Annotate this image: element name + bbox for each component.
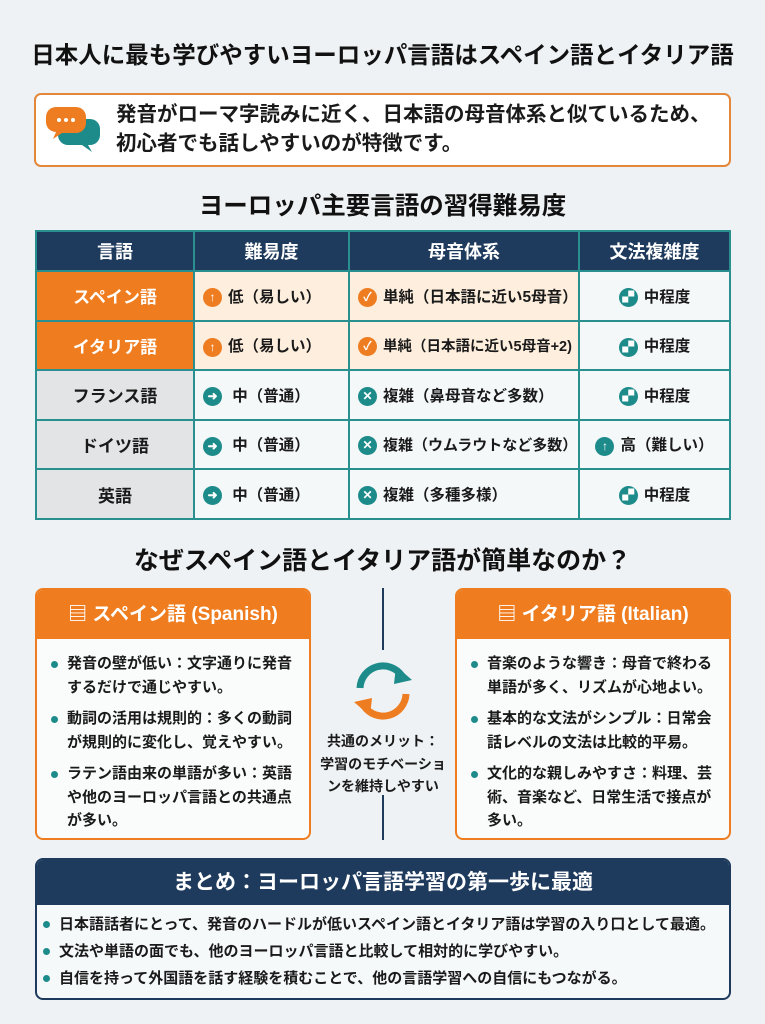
table: ✓	[363, 339, 372, 353]
table: ➜	[207, 488, 218, 502]
table: 低（易しい）	[228, 338, 321, 355]
icon: speech bubbles	[46, 107, 100, 152]
panel: summary: まとめ：ヨーロッパ言語学習の第一歩に最適	[173, 871, 593, 894]
table: ↑	[210, 340, 216, 354]
table: 中（普通）	[232, 487, 310, 504]
table: ➜	[207, 389, 218, 403]
table: 中（普通）	[232, 388, 310, 405]
panel: spanish: 動詞の活用は規則的：多くの動詞が規則的に変化し、覚えやすい。	[67, 710, 292, 750]
panel: spanish: ▤ スペイン語 (Spanish)	[68, 604, 278, 625]
icon: cycle arrows	[354, 662, 412, 720]
panel: summary	[35, 858, 731, 1000]
table: ▞	[622, 389, 634, 403]
panel: summary: 文法や単語の面でも、他のヨーロッパ言語と比較して相対的に学びやすい。	[59, 943, 568, 960]
panel: spanish: 発音の壁が低い：文字通りに発音するだけで通じやすい。	[67, 655, 292, 696]
table: ↑	[210, 290, 216, 304]
table: ✕	[362, 488, 373, 502]
common merit text: 共通のメリット：	[327, 733, 439, 749]
table: 中程度	[644, 289, 690, 306]
table: 複雑（鼻母音など多数）	[383, 388, 554, 405]
divider	[382, 588, 384, 650]
common merit text	[320, 733, 446, 794]
table	[35, 230, 731, 520]
table: 文法複雑度	[610, 242, 700, 262]
table: ▞	[622, 340, 634, 354]
callout	[34, 93, 731, 167]
callout text: 初心者でも話しやすいのが特徴です。	[116, 132, 462, 155]
panel: summary: 日本語話者にとって、発音のハードルが低いスペイン語とイタリア語は学習の入り口として最適。	[59, 916, 715, 933]
panel: summary: 自信を持って外国語を話す経験を積むことで、他の言語学習への自信にもつながる。	[59, 970, 627, 987]
table: スペイン語	[73, 288, 157, 307]
table: 複雑（多種多様）	[383, 487, 507, 504]
callout text: 発音がローマ字読みに近く、日本語の母音体系と似ているため、	[116, 103, 710, 126]
table: ↑	[602, 439, 608, 453]
panel: italian: 音楽のような響き：母音で終わる単語が多く、リズムが心地よい。	[487, 655, 712, 696]
table: 母音体系	[428, 242, 500, 262]
table: ドイツ語	[81, 437, 149, 456]
table: ➜	[207, 439, 218, 453]
common merit text: 学習のモチベーションを維持しやすい	[320, 756, 446, 794]
table: ▞	[622, 488, 634, 502]
table: ▞	[622, 290, 634, 304]
table: 難易度	[244, 242, 298, 262]
panel: italian: ▤ イタリア語 (Italian)	[497, 604, 689, 625]
panel: spanish: ラテン語由来の単語が多い：英語や他のヨーロッパ言語との共通点が多い。	[67, 765, 292, 829]
table: 中（普通）	[232, 437, 310, 454]
panel: spanish	[35, 588, 311, 840]
table: 複雑（ウムラウトなど多数）	[383, 437, 577, 454]
table: 低（易しい）	[228, 289, 321, 306]
panel: italian: 文化的な親しみやすさ：料理、芸術、音楽など、日常生活で接点が多い。	[487, 765, 712, 829]
heading: why: なぜスペイン語とイタリア語が簡単なのか？	[134, 547, 631, 575]
table: 単純（日本語に近い5母音）	[383, 289, 578, 306]
table: 言語	[97, 242, 133, 262]
title: 日本人に最も学びやすいヨーロッパ言語はスペイン語とイタリア語	[31, 42, 734, 68]
table: ✕	[362, 389, 373, 403]
table: フランス語	[73, 387, 157, 406]
heading: table: ヨーロッパ主要言語の習得難易度	[199, 193, 566, 220]
table: 中程度	[644, 388, 690, 405]
callout text	[116, 103, 710, 155]
table: 英語	[98, 487, 132, 506]
table: ✓	[363, 290, 372, 304]
table: 中程度	[644, 487, 690, 504]
table: イタリア語	[73, 338, 157, 357]
table: ✕	[362, 438, 373, 452]
panel: italian	[455, 588, 731, 840]
panel: italian: 基本的な文法がシンプル：日常会話レベルの文法は比較的平易。	[487, 710, 712, 750]
table: 高（難しい）	[620, 437, 714, 454]
table: 単純（日本語に近い5母音+2)	[383, 339, 572, 355]
table: 中程度	[644, 338, 690, 355]
